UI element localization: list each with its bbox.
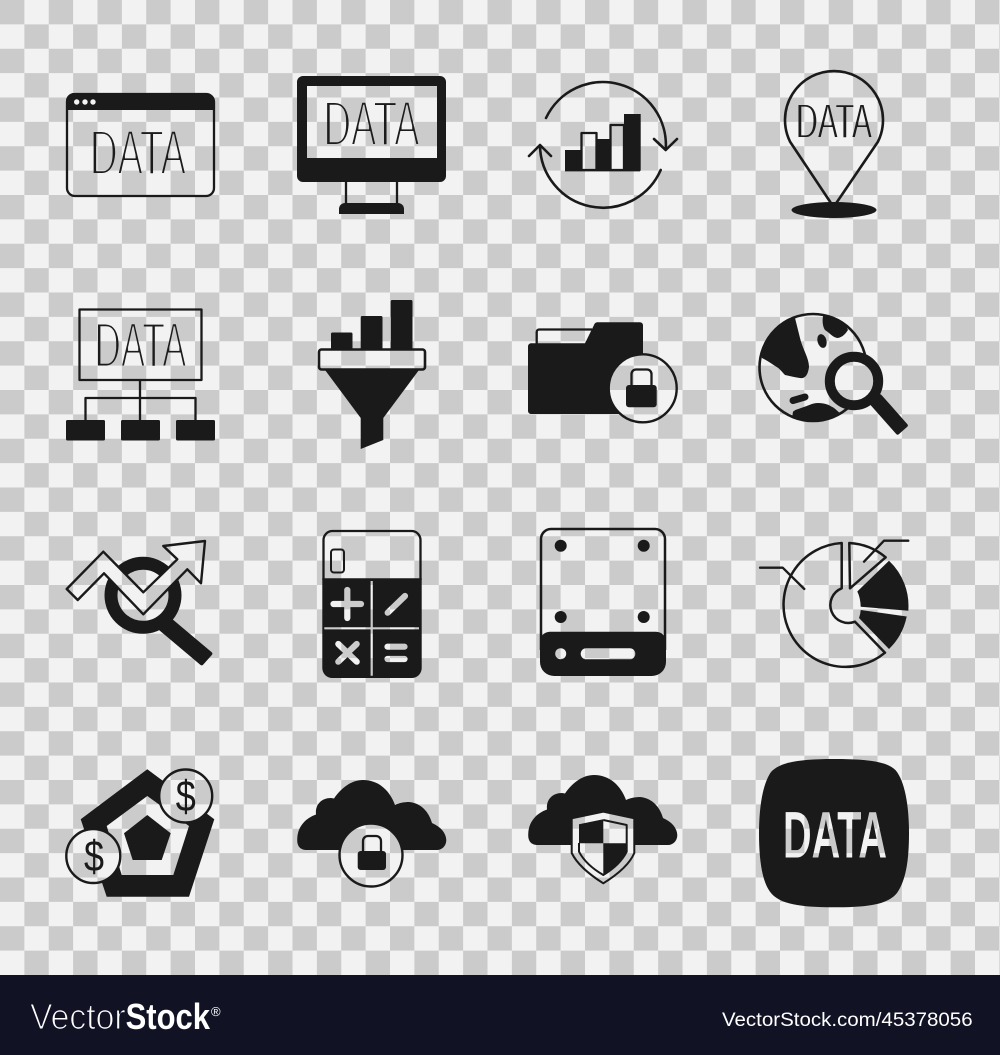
footer bar (0, 975, 1000, 1055)
magnifier (111, 563, 175, 627)
icon: pentagon with dollar coins: $ (176, 772, 196, 821)
icon: DATA badge: DATA (783, 798, 887, 872)
icon: browser window with DATA (66, 93, 214, 196)
pin shadow (792, 202, 876, 218)
icon: cloud with lock (297, 780, 446, 886)
icon: DATA hierarchy diagram: DATA (94, 309, 187, 381)
icon: pie chart with callouts (760, 541, 908, 667)
VectorStock logo: Stock (126, 996, 211, 1037)
icon: calculator (322, 531, 422, 678)
shield (572, 812, 634, 883)
lock badge (609, 354, 677, 422)
icon: cloud with shield (528, 775, 677, 883)
icon: location pin with DATA (785, 71, 883, 218)
icon: desktop monitor with DATA (297, 76, 446, 214)
icon: globe with magnifying glass (750, 305, 906, 433)
icon: browser window with DATA: DATA (90, 116, 186, 188)
icon: trend arrow under magnifier (67, 541, 210, 663)
icon: refresh arrows around bar chart (529, 82, 677, 208)
icon: pentagon with dollar coins: $ (84, 832, 104, 881)
icon: DATA hierarchy diagram (66, 309, 215, 440)
icon: location pin with DATA: DATA (796, 95, 872, 149)
image id: VectorStock.com/45378056 (722, 1009, 973, 1031)
magnifier (830, 357, 878, 405)
VectorStock logo: ® (211, 1004, 221, 1019)
icon: funnel filtering bars (319, 300, 425, 449)
zigzag arrow (67, 541, 205, 614)
icon: hard drive (540, 529, 666, 676)
icon: DATA badge (759, 759, 909, 907)
VectorStock logo: Vector (30, 996, 126, 1037)
VectorStock logo (30, 996, 221, 1037)
coin lower left (66, 829, 120, 883)
icon: pentagon with dollar coins (66, 769, 214, 897)
coin top right (159, 770, 212, 822)
icon: desktop monitor with DATA: DATA (324, 88, 420, 160)
icon: locked folder (528, 322, 677, 422)
